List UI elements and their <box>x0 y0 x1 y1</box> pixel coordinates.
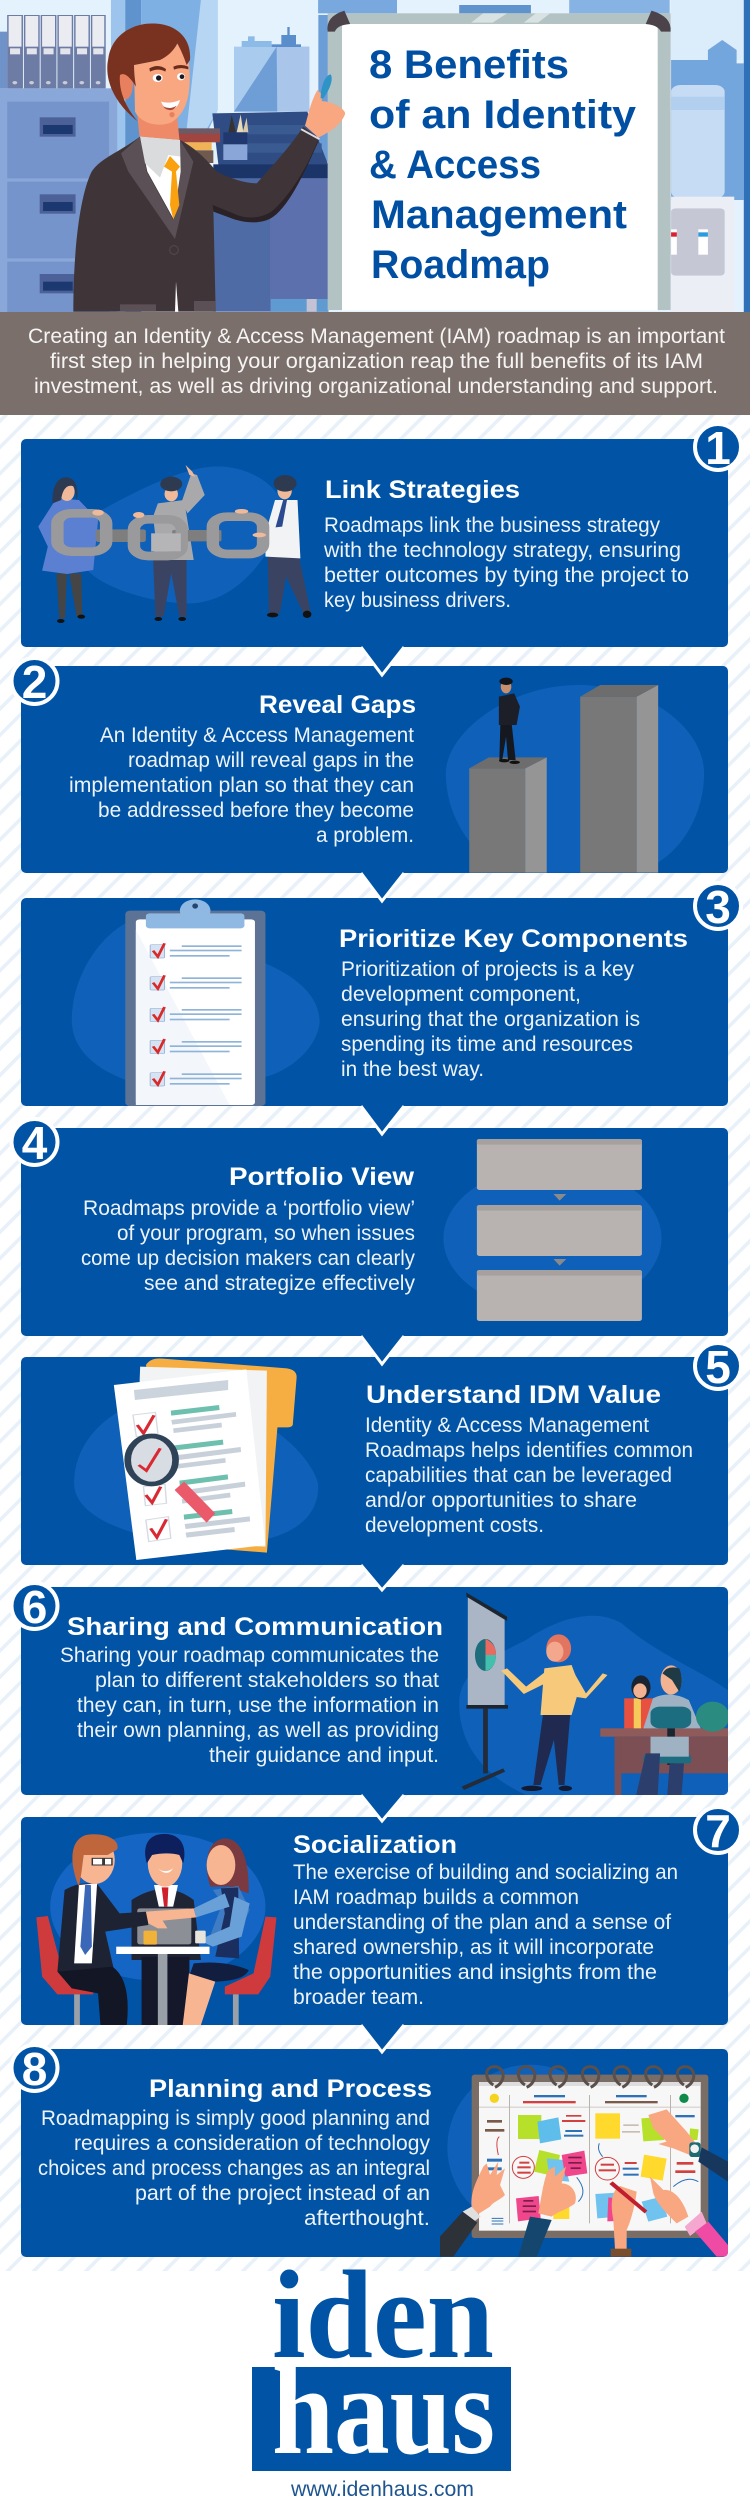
heading and body text: An Identity & Access Management <box>100 724 414 747</box>
number badge 2 <box>12 656 58 708</box>
heading and body text: Understand IDM Value <box>366 1381 661 1409</box>
heading and body text: requires a consideration of technology <box>74 2132 430 2155</box>
heading and body text: development component, <box>341 983 581 1006</box>
number badge 4: 4 <box>22 1117 48 1169</box>
logo: idenhaus <box>0 2246 750 2505</box>
logo: idenhaus: haus <box>272 2342 495 2481</box>
heading and body text <box>38 2075 432 2230</box>
heading and body text: better outcomes by tying the project to <box>324 564 689 587</box>
heading and body text: Socialization <box>293 1831 457 1859</box>
intro band: Creating an Identity & Access Management (IAM) roadmap is an important <box>28 325 725 348</box>
heading and body text <box>339 925 688 1081</box>
heading and body text: with the technology strategy, ensuring <box>323 539 681 562</box>
heading and body text: Reveal Gaps <box>259 691 416 719</box>
panel 8: planning and process <box>21 2049 728 2257</box>
heading and body text: the opportunities and insights from the <box>293 1961 657 1984</box>
intro band <box>0 312 750 415</box>
title: & Access <box>369 143 541 187</box>
heading and body text: spending its time and resources <box>341 1033 633 1056</box>
heading and body text: Planning and Process <box>149 2075 432 2103</box>
heading and body text: come up decision makers can clearly <box>81 1247 415 1270</box>
number badge 4 <box>12 1117 58 1169</box>
heading and body text: they can, in turn, use the information in <box>77 1694 439 1717</box>
panel 3: prioritize key components <box>21 898 728 1106</box>
heading and body text: capabilities that can be leveraged <box>365 1464 672 1487</box>
illustration: stacked process boxes <box>443 1139 662 1321</box>
heading and body text: shared ownership, as it will incorporate <box>293 1936 654 1959</box>
heading and body text: understanding of the plan and a sense of <box>293 1911 671 1934</box>
heading and body text: see and strategize effectively <box>144 1272 416 1295</box>
heading and body text: Roadmapping is simply good planning and <box>41 2107 430 2130</box>
illustration: folder and magnifier <box>74 1358 318 1560</box>
heading and body text <box>81 1163 416 1295</box>
website url: www.idenhaus.com <box>290 2478 474 2501</box>
number badge 8: 8 <box>22 2043 47 2095</box>
heading and body text: Identity & Access Management <box>365 1414 649 1437</box>
title <box>369 43 637 287</box>
panel 2: reveal gaps <box>21 666 728 873</box>
heading and body text: IAM roadmap builds a common <box>293 1886 579 1909</box>
heading and body text: plan to different stakeholders so that <box>95 1669 439 1692</box>
number badge 1 <box>695 422 741 474</box>
heading and body text: a problem. <box>316 824 414 847</box>
panel 5: understand IDM value <box>21 1357 728 1565</box>
heading and body text: in the best way. <box>341 1058 484 1081</box>
heading and body text: roadmap will reveal gaps in the <box>128 749 414 772</box>
heading and body text <box>60 1613 443 1767</box>
panel 6: sharing and communication <box>21 1587 732 1795</box>
heading and body text: broader team. <box>293 1986 424 2009</box>
heading and body text: The exercise of building and socializing an <box>293 1861 678 1884</box>
heading and body text: key business drivers. <box>324 589 511 612</box>
heading and body text: Link Strategies <box>325 476 520 504</box>
illustration: team around table <box>36 1833 276 2025</box>
title: Roadmap <box>371 243 550 287</box>
illustration: people holding chain <box>38 465 311 623</box>
illustration: man on columns <box>446 678 704 873</box>
heading and body text: Sharing your roadmap communicates the <box>60 1644 439 1667</box>
panel 7: socialization <box>21 1817 728 2025</box>
heading and body text: Roadmaps provide a ‘portfolio view’ <box>83 1197 415 1220</box>
number badge 6 <box>12 1581 58 1633</box>
filing cabinet <box>0 15 117 312</box>
title: of an Identity <box>369 93 637 137</box>
presenter figure <box>73 23 345 312</box>
heading and body text: their guidance and input. <box>209 1744 439 1767</box>
whiteboard <box>327 11 671 311</box>
heading and body text <box>323 476 689 612</box>
illustration: planning calendar with hands <box>440 2065 728 2257</box>
heading and body text: Prioritization of projects is a key <box>341 958 634 981</box>
heading and body text: choices and process changes as an integral <box>38 2157 430 2180</box>
logo: idenhaus: iden <box>272 2246 494 2385</box>
heading and body text: Roadmaps helps identifies common <box>365 1439 693 1462</box>
heading and body text <box>365 1381 693 1537</box>
panel 1: link strategies <box>21 439 728 647</box>
heading and body text: be addressed before they become <box>98 799 414 822</box>
number badge 7 <box>695 1805 741 1857</box>
number badge 5: 5 <box>705 1341 731 1393</box>
heading and body text: Sharing and Communication <box>67 1613 443 1641</box>
number badge 2: 2 <box>22 656 47 708</box>
illustration: presenter and audience <box>459 1593 732 1795</box>
intro band: first step in helping your organization reap the full benefits of its IAM <box>50 350 703 373</box>
number badge 1: 1 <box>705 422 731 474</box>
heading and body text: ensuring that the organization is <box>341 1008 640 1031</box>
illustration: clipboard checklist <box>72 899 320 1106</box>
heading and body text: afterthought. <box>304 2207 430 2230</box>
heading and body text <box>293 1831 678 2009</box>
panel 4: portfolio view <box>21 1128 728 1336</box>
number badge 3 <box>695 881 741 933</box>
connector arrows between panels <box>361 647 404 2052</box>
heading and body text: of your program, so when issues <box>117 1222 415 1245</box>
heading and body text: Roadmaps link the business strategy <box>324 514 660 537</box>
heading and body text: part of the project instead of an <box>135 2182 430 2205</box>
number badge 5 <box>695 1341 741 1393</box>
number badge 3: 3 <box>705 881 731 933</box>
heading and body text: implementation plan so that they can <box>69 774 414 797</box>
heading and body text <box>69 691 416 847</box>
number badge 6: 6 <box>22 1581 47 1633</box>
header illustration <box>0 0 750 312</box>
title: Management <box>371 193 627 237</box>
heading and body text: Prioritize Key Components <box>339 925 688 953</box>
intro band: investment, as well as driving organizational understanding and support. <box>34 375 718 398</box>
heading and body text: their own planning, as well as providing <box>77 1719 439 1742</box>
number badge 8 <box>12 2043 58 2095</box>
heading and body text: Portfolio View <box>229 1163 415 1191</box>
heading and body text: and/or opportunities to share <box>365 1489 637 1512</box>
title: 8 Benefits <box>369 43 569 87</box>
heading and body text: development costs. <box>365 1514 544 1537</box>
number badge 7: 7 <box>705 1805 731 1857</box>
